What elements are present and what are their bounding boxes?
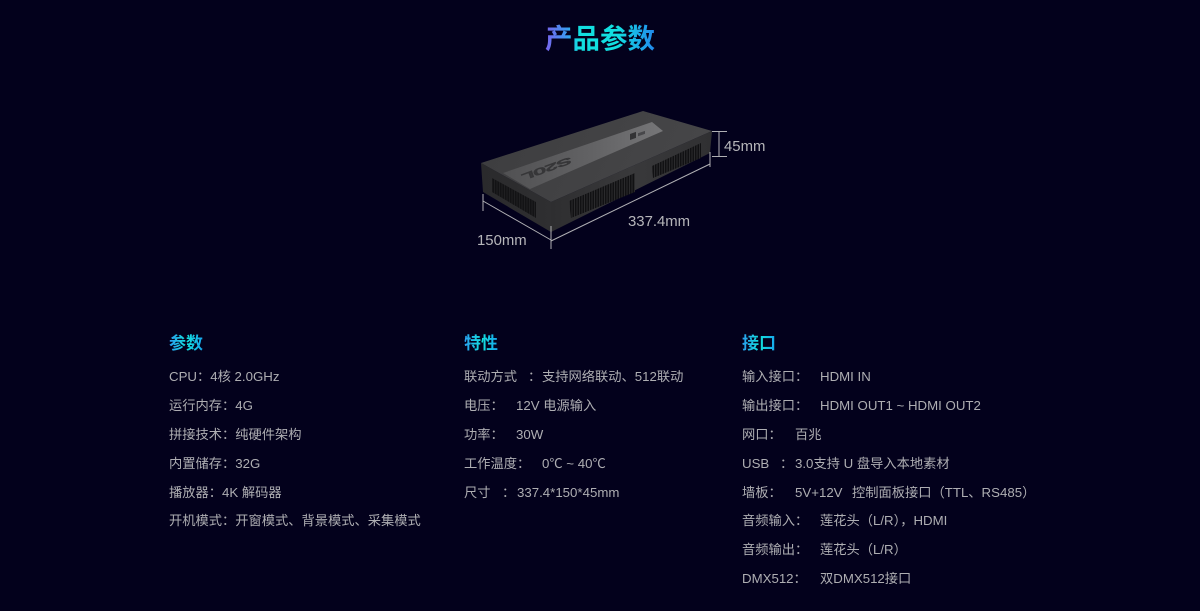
panel: 接口 list: 网口：	[742, 427, 782, 442]
panel: 参数 list	[169, 369, 421, 528]
panel: 特性 list: 0℃ ~ 40℃	[542, 456, 606, 471]
panel: 接口 list	[742, 369, 1035, 586]
panel: 特性 list: 工作温度：	[464, 456, 530, 471]
top face	[481, 111, 712, 202]
dimension labels: 150mm	[477, 233, 527, 249]
panel: 特性 list: 联动方式	[464, 369, 517, 384]
dimension labels: 337.4mm	[628, 214, 690, 230]
panel: 接口 list: DMX512：	[742, 571, 807, 586]
panel: 接口 list: 音频输入：	[742, 513, 808, 528]
product diagram	[477, 111, 765, 249]
panel: 特性 list: 尺寸	[464, 485, 491, 500]
dimension lines	[483, 132, 727, 249]
dimension labels: 45mm	[724, 139, 765, 155]
panel: 接口 list: USB	[742, 456, 769, 471]
short side vent	[492, 178, 536, 218]
long side vent left	[569, 173, 635, 218]
panel: 特性 list: ：	[528, 369, 541, 384]
panel: 接口 list: 输入接口：	[742, 369, 808, 384]
panel: 特性 list: 功率：	[464, 427, 504, 442]
panel: 接口 list: 音频输出：	[742, 542, 808, 557]
long side vent right	[652, 143, 701, 178]
panel: 特性 list: 电压：	[464, 398, 504, 413]
dimension labels	[477, 139, 765, 249]
panel: 特性 list: 337.4*150*45mm	[517, 485, 619, 500]
panel: 接口 list: HDMI IN	[820, 369, 871, 384]
device body	[481, 111, 712, 232]
panel: 参数 list: CPU：4核 2.0GHz	[169, 369, 279, 384]
panel: 接口 list: 双DMX512接口	[820, 571, 911, 586]
panel: 参数 list: 运行内存：4G	[169, 398, 253, 413]
panel: 接口 list: 莲花头（L/R），HDMI	[820, 513, 947, 528]
panel: 特性 list: 30W	[516, 427, 543, 442]
short side face	[481, 163, 551, 232]
title: 产品参数	[545, 16, 655, 56]
long side face	[551, 131, 712, 232]
logo	[630, 129, 645, 140]
panel: 参数 list: 内置储存：32G	[169, 456, 260, 471]
panel: 接口 list: 5V+12V	[795, 485, 843, 500]
label strip	[503, 122, 663, 189]
panel: 参数 heading: 参数	[169, 329, 203, 354]
panel: 接口 list: HDMI OUT1 ~ HDMI OUT2	[820, 398, 981, 413]
panel: 特性 heading: 特性	[464, 329, 498, 354]
panel: 特性 list: ：	[502, 485, 515, 500]
panel: 接口 heading: 接口	[742, 329, 776, 354]
panel: 接口 list: 百兆	[795, 427, 822, 442]
panel: 参数 list: 播放器：4K 解码器	[169, 485, 282, 500]
panel: 参数 list: 拼接技术：纯硬件架构	[169, 427, 302, 442]
panel: 特性 list	[464, 369, 683, 500]
strip wordmark: S20L	[520, 155, 573, 182]
panel: 特性 list: 支持网络联动、512联动	[542, 369, 683, 384]
panel: 接口 list: 输出接口：	[742, 398, 808, 413]
panel: 接口 list: ：	[780, 456, 793, 471]
panel: 参数 list: 开机模式：开窗模式、背景模式、采集模式	[169, 513, 421, 528]
panel: 特性 list: 12V 电源输入	[516, 398, 596, 413]
panel: 接口 list: 控制面板接口（TTL、RS485）	[852, 485, 1035, 500]
panel: 接口 list: 莲花头（L/R）	[820, 542, 907, 557]
panel: 接口 list: 3.0支持 U 盘导入本地素材	[795, 456, 950, 471]
panel: 接口 list: 墙板：	[742, 485, 782, 500]
